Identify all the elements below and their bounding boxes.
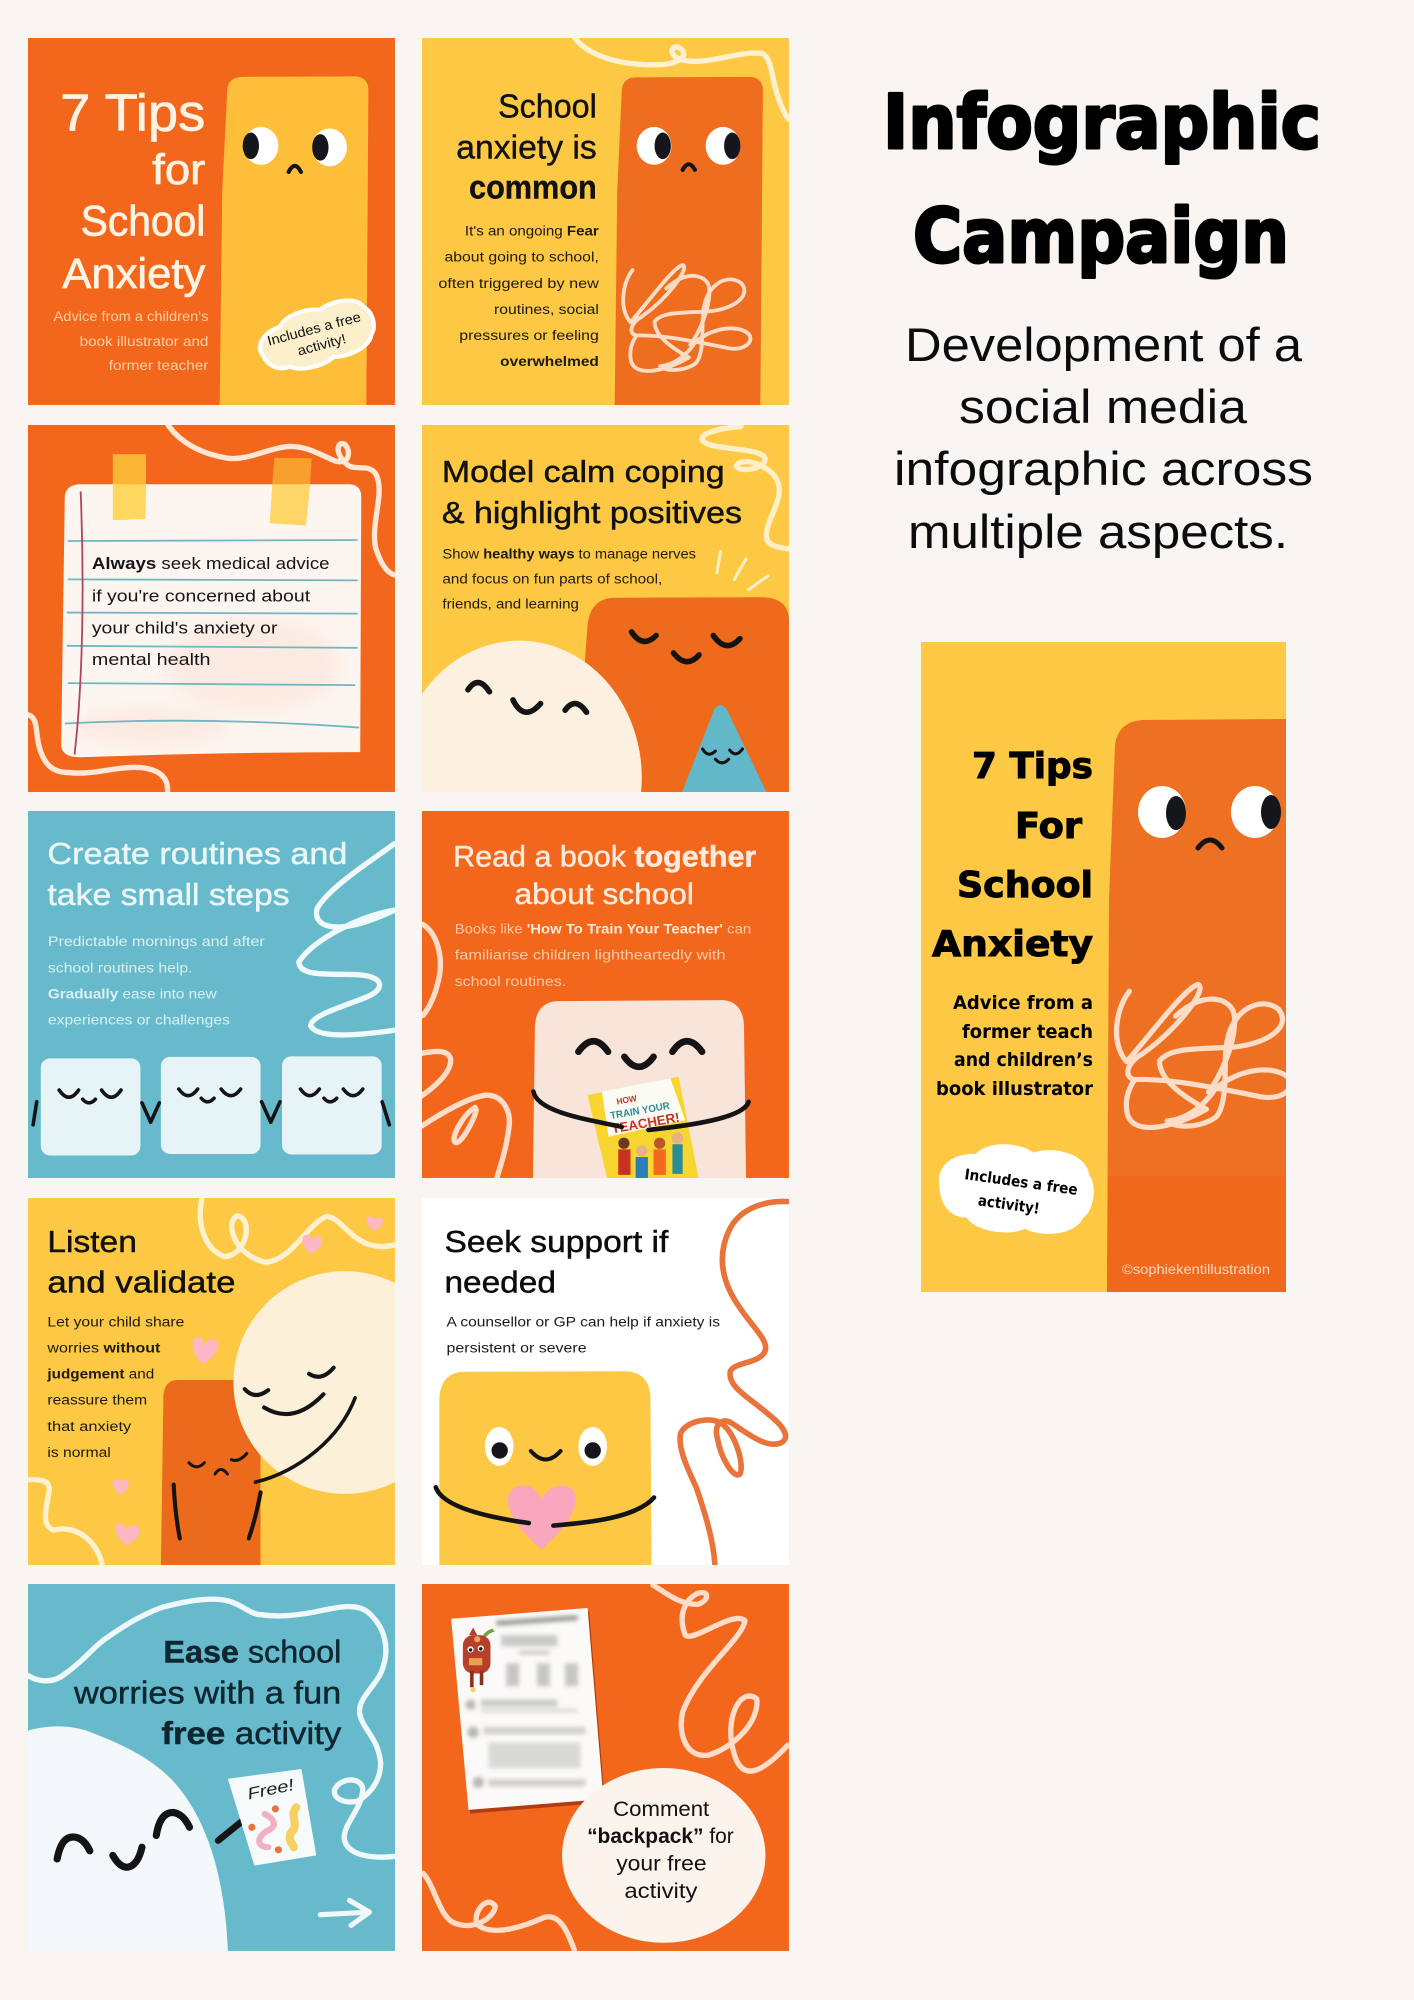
subtitle: former teacher (109, 358, 209, 373)
note text: Always seek medical advice (92, 554, 330, 573)
heading: Seek support if (444, 1225, 669, 1259)
subtitle: Advice from a children's (54, 309, 209, 324)
arms (436, 1487, 654, 1526)
note text: if you're concerned about (92, 586, 310, 605)
heading: and validate (47, 1266, 236, 1300)
cream round character (422, 640, 642, 792)
body text (48, 934, 265, 1028)
squiggle (702, 427, 788, 549)
body text: Books like 'How To Train Your Teacher' can (455, 922, 751, 937)
heading: Read a book together (453, 841, 757, 874)
squiggle (299, 844, 394, 1035)
poster cloud badge (933, 1135, 1099, 1245)
poster heading: 7 Tips (972, 746, 1093, 787)
body text (455, 922, 751, 989)
book cover: TRAIN YOUR (609, 1101, 671, 1122)
body text: that anxiety (47, 1419, 131, 1434)
orange character (615, 77, 763, 405)
body text: reassure them (47, 1392, 147, 1407)
heading (444, 1225, 669, 1300)
poster heading: For (1015, 806, 1082, 847)
book cover: TEACHER! (610, 1110, 681, 1136)
blue triangle character (682, 705, 766, 792)
heading: take small steps (47, 878, 290, 912)
free activity sheet (228, 1769, 316, 1866)
credit: ©sophiekentillustration (1122, 1261, 1270, 1277)
heading: 7 Tips (60, 85, 205, 143)
heading: anxiety is (456, 129, 597, 167)
call to action (587, 1797, 734, 1903)
orange character (575, 597, 789, 792)
subtitle (54, 309, 209, 373)
heading: about school (515, 878, 694, 911)
squiggle (28, 1599, 394, 1857)
backpack mascot (463, 1627, 494, 1692)
poster cloud badge: activity! (977, 1191, 1041, 1218)
heading (458, 93, 596, 199)
orange character (1107, 719, 1286, 1292)
heading: School (81, 197, 205, 245)
panel: always seek medical advice (28, 425, 395, 792)
body text: often triggered by new (438, 276, 599, 291)
rays (717, 551, 768, 590)
body text (438, 223, 600, 369)
body text: worries without (46, 1340, 161, 1355)
scribble (623, 265, 750, 371)
body text: experiences or challenges (48, 1013, 230, 1028)
body text: Show healthy ways to manage nerves (442, 546, 696, 561)
panel: ease school worries (28, 1584, 395, 1951)
poster subtitle: and children’s (954, 1049, 1093, 1071)
free activity sheet: Free! (246, 1776, 296, 1803)
body text: Gradually ease into new (48, 987, 217, 1002)
note text (92, 554, 330, 669)
panel: 7 tips for school anxiety (28, 38, 395, 405)
cube characters holding hands (33, 1056, 389, 1155)
heading: for (152, 146, 205, 194)
poster subtitle: book illustrator (936, 1078, 1094, 1100)
white moon character (28, 1726, 245, 1951)
heading: common (469, 168, 597, 206)
poster heading (932, 746, 1093, 965)
ruled lines (65, 540, 359, 728)
cloud badge: Includes a free (266, 309, 363, 349)
character with book (533, 1000, 749, 1178)
body text: routines, social (494, 302, 599, 317)
squiggle (575, 38, 788, 119)
hearts (112, 1216, 383, 1546)
speech circle (562, 1768, 765, 1943)
note text: mental health (92, 650, 210, 669)
heading: School (498, 88, 597, 126)
note text: your child's anxiety or (92, 619, 278, 638)
blurred worksheet content (465, 1615, 586, 1788)
book cover (588, 1077, 699, 1178)
panel: seek support (422, 1198, 789, 1565)
activity worksheet (451, 1608, 605, 1813)
body text: Let your child share (47, 1314, 185, 1329)
poster subtitle (936, 992, 1094, 1100)
poster heading: Anxiety (932, 924, 1093, 965)
body text (447, 1314, 720, 1355)
panel: create routines (28, 811, 395, 1178)
cloud badge: activity! (296, 331, 348, 359)
description: infographic across (894, 442, 1313, 495)
heading (73, 1634, 341, 1751)
yellow character (439, 1371, 651, 1565)
heading (442, 455, 742, 530)
yellow character (220, 76, 368, 405)
panel: comment backpack (422, 1584, 789, 1951)
panel: school anxiety is common (422, 38, 789, 405)
body text: A counsellor or GP can help if anxiety is (447, 1314, 720, 1329)
poster subtitle: former teach (962, 1021, 1093, 1043)
body text: familiarise children lightheartedly with (455, 948, 726, 963)
title: Campaign (913, 192, 1289, 280)
squiggles (29, 1200, 394, 1564)
body text: friends, and learning (442, 596, 579, 611)
squiggle (680, 1201, 788, 1564)
heading: Create routines and (47, 837, 347, 871)
poster heading: School (957, 865, 1093, 906)
poster subtitle: Advice from a (953, 992, 1093, 1014)
heading (60, 85, 206, 298)
body text: Predictable mornings and after (48, 934, 265, 949)
description: social media (959, 380, 1248, 433)
heading (455, 844, 756, 904)
tape (113, 454, 312, 526)
torn note paper (61, 484, 361, 757)
body text: about going to school, (444, 249, 599, 264)
call to action: your free (616, 1852, 707, 1876)
description: multiple aspects. (908, 505, 1288, 558)
cream moon character (233, 1271, 456, 1494)
squiggles (422, 924, 509, 1177)
squiggles (28, 425, 394, 791)
body text: school routines. (455, 974, 566, 989)
description (894, 318, 1313, 558)
heading: Model calm coping (442, 455, 725, 489)
book cover: HOW (616, 1093, 638, 1107)
body text: and focus on fun parts of school, (442, 571, 662, 586)
body text: It's an ongoing Fear (465, 223, 600, 238)
call to action: “backpack” for (587, 1824, 734, 1848)
scribble (1117, 984, 1291, 1127)
cloud badge (258, 298, 376, 371)
body text (442, 546, 696, 611)
heading: Listen (47, 1225, 137, 1259)
title: Infographic (883, 78, 1321, 166)
heading (47, 837, 347, 912)
heading: & highlight positives (442, 496, 742, 530)
body text (46, 1314, 185, 1460)
squiggles (423, 1585, 788, 1950)
heading: Anxiety (62, 250, 206, 298)
heading: needed (444, 1266, 556, 1300)
description: Development of a (905, 318, 1303, 371)
heading: worries with a fun (73, 1675, 341, 1711)
arrow (320, 1900, 369, 1925)
body text: school routines help. (48, 961, 193, 976)
body text: is normal (47, 1445, 111, 1460)
poster cloud badge: Includes a free (963, 1165, 1079, 1199)
margin line (75, 491, 83, 755)
heart (508, 1485, 576, 1550)
orange character (161, 1380, 261, 1565)
heading: free activity (161, 1715, 341, 1751)
call to action: Comment (613, 1797, 709, 1821)
body text: persistent or severe (447, 1340, 587, 1355)
panel: campaign poster (921, 642, 1291, 1292)
heading (47, 1225, 236, 1300)
heading: Ease school (163, 1634, 341, 1670)
panel: read a book together (422, 811, 789, 1178)
call to action: activity (624, 1879, 698, 1903)
title (883, 78, 1321, 280)
panel: listen and validate (28, 1198, 395, 1565)
body text: judgement and (46, 1366, 154, 1381)
subtitle: book illustrator and (80, 334, 208, 349)
panel: model calm coping (422, 425, 789, 792)
body text: overwhelmed (500, 354, 599, 369)
body text: pressures or feeling (459, 328, 599, 343)
